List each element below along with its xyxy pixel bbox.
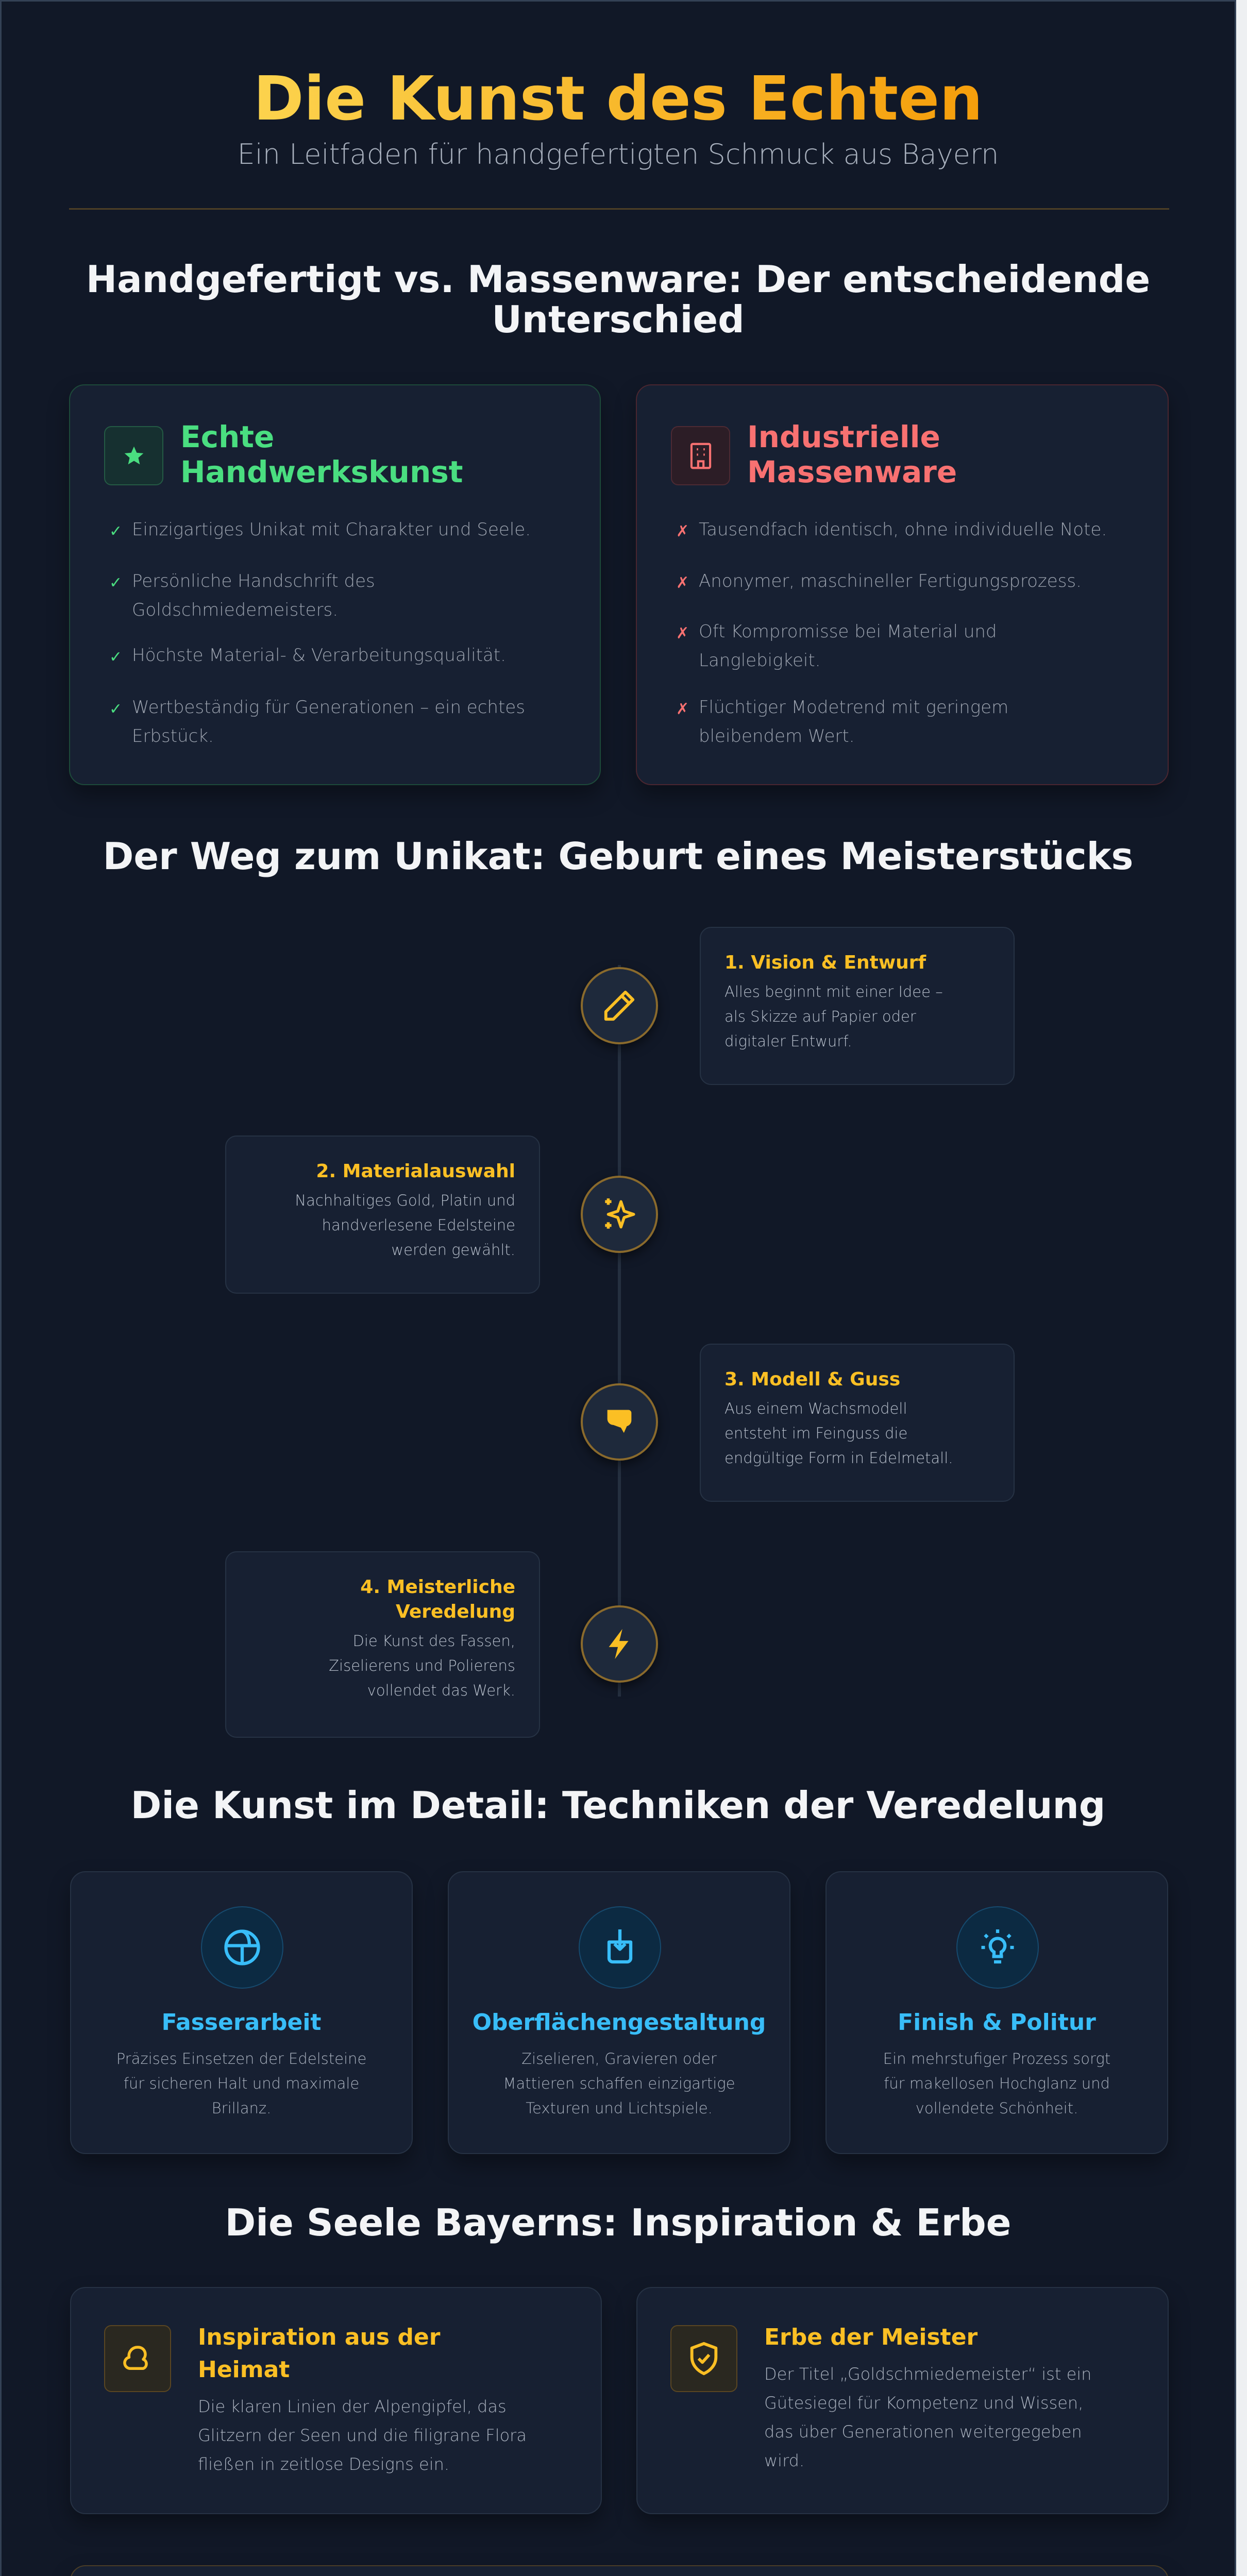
list: mass	[676, 519, 1107, 747]
step 2 card: 2. Materialauswahl	[316, 1161, 515, 1182]
list: handmade: Wertbeständig für Generationen – ein echtes	[132, 697, 525, 718]
icon: pencil	[581, 967, 658, 1044]
text: inspiration: Die klaren Linien der Alpengipfel, das	[198, 2397, 507, 2416]
step 3 card: entsteht im Feinguss die	[724, 1425, 907, 1442]
icon: star	[104, 426, 163, 485]
step 2 card: Nachhaltiges Gold, Platin und	[295, 1192, 515, 1209]
panel: finish: für makellosen Hochglanz und	[884, 2075, 1110, 2092]
step 4 card	[225, 1551, 540, 1738]
panel: handmade	[69, 384, 601, 785]
heading: bavaria: Die Seele Bayerns: Inspiration & Erbe	[225, 2201, 1011, 2244]
text: inspiration: fließen in zeitlose Designs ein.	[198, 2454, 449, 2474]
list: handmade	[109, 519, 531, 747]
heading: mass	[747, 419, 957, 489]
step 1 card: digitaler Entwurf.	[724, 1032, 852, 1050]
step 2 card	[225, 1136, 540, 1294]
panel: setting: Brillanz.	[212, 2099, 271, 2117]
icon: building	[671, 426, 730, 485]
icon: surface	[579, 1906, 661, 1989]
step 3 card: endgültige Form in Edelmetall.	[724, 1449, 953, 1467]
step 1 card: 1. Vision & Entwurf	[724, 952, 926, 973]
step 2 card: handverlesene Edelsteine	[322, 1216, 515, 1234]
panel: checklist	[70, 2565, 1169, 2576]
panel: setting: für sicheren Halt und maximale	[124, 2075, 359, 2092]
heading: timeline: Der Weg zum Unikat: Geburt eines Meisterstücks	[103, 835, 1133, 878]
text: heritage: Der Titel „Goldschmiedemeister“ ist ein	[764, 2364, 1091, 2384]
heading: mass: Massenware	[747, 454, 957, 489]
text: heritage: Erbe der Meister	[764, 2324, 978, 2350]
step 3 card: Aus einem Wachsmodell	[724, 1400, 907, 1417]
step 4 card: Die Kunst des Fassen,	[352, 1632, 515, 1650]
list: handmade: ✓	[109, 700, 122, 718]
step 3 card: 3. Modell & Guss	[724, 1369, 900, 1390]
panel: finish	[825, 1871, 1168, 2154]
list: handmade: Persönliche Handschrift des	[132, 571, 375, 591]
list: mass: ✗	[676, 522, 689, 540]
heading: mass: Industrielle	[747, 419, 940, 454]
panel: surface: Oberflächengestaltung	[473, 2009, 766, 2036]
step 4 card: 4. Meisterliche	[360, 1577, 515, 1598]
list: handmade: ✓	[109, 522, 122, 540]
list: mass: ✗	[676, 574, 689, 592]
text: inspiration: Inspiration aus der	[198, 2324, 440, 2350]
panel: finish: vollendete Schönheit.	[916, 2099, 1078, 2117]
step 1 card: Alles beginnt mit einer Idee –	[724, 983, 943, 1001]
icon: sparkles	[581, 1176, 658, 1253]
text: heritage: Gütesiegel für Kompetenz und Wissen,	[764, 2393, 1083, 2413]
step 2 card: werden gewählt.	[391, 1241, 515, 1259]
text: inspiration: Heimat	[198, 2357, 290, 2383]
heading: comparison	[86, 258, 1150, 341]
icon: setting	[201, 1906, 283, 1989]
heading: handmade: Handwerkskunst	[180, 454, 463, 489]
list: mass: bleibendem Wert.	[699, 726, 855, 747]
panel: surface: Ziselieren, Gravieren oder	[521, 2050, 717, 2067]
timeline	[225, 927, 1015, 1738]
subtitle: Ein Leitfaden für handgefertigten Schmuck aus Bayern	[238, 138, 999, 171]
list: mass: Tausendfach identisch, ohne individuelle Note.	[699, 519, 1107, 540]
icon: bolt	[581, 1605, 658, 1683]
text: heritage: wird.	[764, 2451, 804, 2470]
list: mass: Langlebigkeit.	[699, 650, 821, 671]
list: handmade: ✓	[109, 574, 122, 592]
step 3 card	[700, 1344, 1015, 1502]
heading: techniques: Die Kunst im Detail: Techniken der Veredelung	[131, 1784, 1105, 1827]
list: handmade: Einzigartiges Unikat mit Charakter und Seele.	[132, 519, 531, 540]
panel: heritage	[636, 2287, 1169, 2514]
icon: cloud	[104, 2325, 171, 2392]
title: Die Kunst des Echten	[254, 63, 983, 134]
list: handmade: Höchste Material- & Verarbeitungsqualität.	[132, 645, 506, 666]
list: mass: ✗	[676, 624, 689, 642]
icon: mold	[581, 1383, 658, 1461]
icon: shield	[670, 2325, 737, 2392]
text: heritage	[764, 2324, 1091, 2470]
panel: finish: Finish & Politur	[898, 2009, 1096, 2036]
text: inspiration	[198, 2324, 527, 2474]
list: handmade: Goldschmiedemeisters.	[132, 600, 338, 620]
heading: comparison: Handgefertigt vs. Massenware: Der entscheidende	[86, 258, 1150, 301]
step 4 card: Veredelung	[396, 1601, 515, 1622]
heading: comparison: Unterschied	[492, 298, 745, 341]
panel: surface: Mattieren schaffen einzigartige	[503, 2075, 735, 2092]
panel: inspiration	[70, 2287, 602, 2514]
heading: handmade	[180, 419, 463, 489]
panel: mass production	[636, 384, 1169, 785]
panel: setting	[70, 1871, 413, 2154]
list: handmade: Erbstück.	[132, 726, 214, 747]
text: heritage: das über Generationen weitergegeben	[764, 2422, 1082, 2442]
panel: finish: Ein mehrstufiger Prozess sorgt	[883, 2050, 1110, 2067]
list: mass: Oft Kompromisse bei Material und	[699, 621, 997, 642]
list: mass: Anonymer, maschineller Fertigungsprozess.	[699, 571, 1082, 591]
panel: surface	[448, 1871, 790, 2154]
icon: bulb	[956, 1906, 1039, 1989]
panel: setting: Fasserarbeit	[162, 2009, 321, 2036]
panel: surface: Texturen und Lichtspiele.	[526, 2099, 713, 2117]
panel: setting: Präzises Einsetzen der Edelsteine	[116, 2050, 366, 2067]
step 4 card: Ziselierens und Polierens	[329, 1657, 515, 1674]
heading: handmade: Echte	[180, 419, 274, 454]
list: mass: ✗	[676, 700, 689, 718]
step 1 card	[700, 927, 1015, 1085]
step 1 card: als Skizze auf Papier oder	[724, 1008, 916, 1025]
list: mass: Flüchtiger Modetrend mit geringem	[699, 697, 1008, 718]
step 4 card: vollendet das Werk.	[367, 1682, 515, 1699]
list: handmade: ✓	[109, 648, 122, 666]
text: inspiration: Glitzern der Seen und die filigrane Flora	[198, 2426, 527, 2445]
